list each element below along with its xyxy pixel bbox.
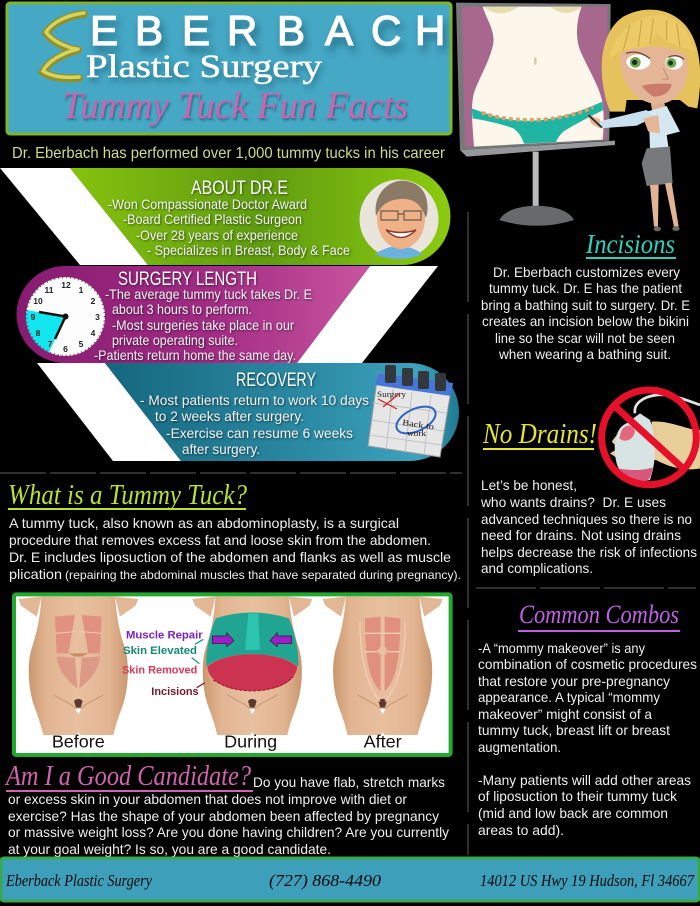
bullet list: -Won Compassionate Doctor Award bbox=[108, 196, 307, 212]
icon: calendar: Surgery bbox=[377, 390, 406, 399]
body text: helps decrease the risk of infections bbox=[481, 544, 697, 560]
icon: prohibited drain bbox=[602, 390, 700, 485]
icon: calendar: work bbox=[407, 428, 427, 438]
bullet list: - Specializes in Breast, Body & Face bbox=[147, 242, 350, 258]
section: common combos bbox=[478, 600, 697, 838]
bullet list bbox=[94, 286, 312, 363]
icon: clock: 10 bbox=[33, 296, 43, 306]
before figure: Before bbox=[52, 732, 105, 752]
body text: tummy tuck. Dr. E has the patient bbox=[489, 280, 682, 296]
body text: bring a bathing suit to surgery. Dr. E bbox=[481, 297, 690, 313]
icon: calendar bbox=[368, 365, 453, 457]
icon: clock: 7 bbox=[48, 339, 53, 349]
icon: clock: 9 bbox=[31, 312, 36, 322]
body text: procedure that removes excess fat and loose skin from the abdomen. bbox=[9, 532, 431, 548]
body text: appearance. A typical “mommy bbox=[478, 689, 660, 705]
body text: that restore your pre-pregnancy bbox=[478, 673, 670, 689]
body text: combination of cosmetic procedures bbox=[478, 656, 697, 672]
icon: clock: 5 bbox=[79, 339, 84, 349]
illustration: presenter with abdomen board bbox=[456, 3, 700, 231]
body text: A tummy tuck, also known as an abdominoplasty, is a surgical bbox=[9, 515, 399, 531]
body text: Do you have flab, stretch marks bbox=[253, 774, 445, 790]
bullet list bbox=[140, 392, 369, 457]
heading: What is a Tummy Tuck? bbox=[8, 480, 247, 511]
body text: line so the scar will not be seen bbox=[495, 330, 675, 346]
icon: clock: 3 bbox=[95, 312, 100, 322]
body text: Dr. E includes liposuction of the abdomen and flanks as well as muscle bbox=[9, 549, 451, 565]
bullet list: -Most surgeries take place in our bbox=[112, 317, 294, 333]
body text bbox=[480, 477, 697, 576]
board bbox=[456, 3, 615, 226]
heading: ABOUT DR.E bbox=[191, 178, 288, 199]
portrait of doctor bbox=[360, 180, 438, 259]
body text: areas to add). bbox=[478, 822, 564, 838]
section: what is a tummy tuck bbox=[8, 480, 461, 582]
body text: creates an incision below the bikini bbox=[482, 313, 689, 329]
bullet list: to 2 weeks after surgery. bbox=[155, 408, 304, 424]
bullet list: -Over 28 years of experience bbox=[136, 227, 298, 243]
icon: clock bbox=[26, 277, 105, 356]
icon: clock: 2 bbox=[91, 296, 96, 306]
body text: or massive weight loss? Are you done having children? Are you currently bbox=[8, 824, 449, 840]
body text: Dr. Eberbach customizes every bbox=[493, 264, 680, 280]
callout labels: Skin Elevated bbox=[123, 645, 197, 657]
body text bbox=[9, 515, 461, 582]
heading: RECOVERY bbox=[236, 370, 316, 391]
footer contact bar bbox=[1, 858, 699, 901]
panel: recovery bbox=[37, 363, 459, 461]
bullet list: -Board Certified Plastic Surgeon bbox=[123, 211, 302, 227]
icon: clock: 11 bbox=[44, 285, 54, 295]
after figure bbox=[323, 597, 443, 752]
body text: when wearing a bathing suit. bbox=[498, 346, 671, 362]
during figure bbox=[122, 597, 312, 752]
panel: about Dr. E bbox=[0, 168, 450, 265]
heading: No Drains! bbox=[482, 419, 597, 450]
body text: Let’s be honest, bbox=[481, 477, 577, 493]
logo wordmark: EBERBACH bbox=[90, 7, 445, 54]
body text: and complications. bbox=[481, 560, 593, 576]
body text: of liposuction to their tummy tuck bbox=[478, 788, 678, 804]
body text: plication bbox=[9, 566, 62, 582]
section: incisions bbox=[481, 229, 690, 362]
bullet list: private operating suite. bbox=[112, 332, 238, 348]
body text: tummy tuck, breast lift or breast bbox=[478, 722, 670, 738]
body text bbox=[481, 264, 690, 362]
callout labels: Skin Removed bbox=[122, 665, 197, 677]
icon: clock: 1 bbox=[79, 285, 84, 295]
body text: (mid and low back are common bbox=[478, 805, 668, 821]
before figure bbox=[18, 597, 138, 752]
logo mark bbox=[43, 13, 84, 78]
bullet list: - Most patients return to work 10 days bbox=[140, 392, 369, 408]
body text: (repairing the abdominal muscles that have separated during pregnancy). bbox=[65, 568, 461, 582]
body text: advanced techniques so there is no bbox=[481, 511, 692, 527]
heading: Am I a Good Candidate? bbox=[4, 761, 251, 792]
heading: Incisions bbox=[585, 229, 675, 259]
bullet list: -The average tummy tuck takes Dr. E bbox=[105, 286, 312, 302]
body text: augmentation. bbox=[478, 739, 561, 755]
practice name: Eberback Plastic Surgery bbox=[5, 871, 152, 890]
icon: clock: 6 bbox=[63, 344, 68, 354]
tagline: Dr. Eberbach has performed over 1,000 tummy tucks in his career bbox=[12, 145, 446, 162]
heading: Common Combos bbox=[519, 600, 679, 629]
icon: clock: 8 bbox=[36, 328, 41, 338]
bullet list: -Exercise can resume 6 weeks bbox=[166, 425, 353, 441]
bullet list: after surgery. bbox=[182, 441, 260, 457]
bullet list bbox=[108, 196, 350, 258]
section: no drains bbox=[480, 390, 700, 576]
during figure: During bbox=[224, 732, 277, 752]
callout labels bbox=[122, 629, 203, 698]
logo subtitle: Plastic Surgery bbox=[86, 49, 323, 85]
body text: at your goal weight? Is so, you are a good candidate. bbox=[8, 841, 331, 857]
body text: -Many patients will add other areas bbox=[478, 772, 691, 788]
bullet list: about 3 hours to perform. bbox=[112, 301, 252, 317]
body text: exercise? Has the shape of your abdomen been affected by pregnancy bbox=[8, 808, 439, 824]
callout labels: Incisions bbox=[151, 686, 199, 698]
body text bbox=[478, 640, 697, 838]
header banner bbox=[7, 3, 451, 134]
body text: or excess skin in your abdomen that does not improve with diet or bbox=[8, 791, 407, 807]
phone: (727) 868-4490 bbox=[269, 871, 382, 890]
callout labels: Muscle Repair bbox=[126, 629, 203, 641]
panel: before, during, after diagram bbox=[14, 594, 451, 755]
title: Tummy Tuck Fun Facts bbox=[62, 85, 408, 127]
section: good candidate bbox=[4, 761, 449, 857]
after figure: After bbox=[364, 732, 402, 752]
panel: surgery length bbox=[16, 266, 438, 363]
heading: SURGERY LENGTH bbox=[118, 269, 257, 290]
body text: who wants drains? Dr. E uses bbox=[480, 494, 666, 510]
body text: need for drains. Not using drains bbox=[481, 527, 681, 543]
bullet list: -Patients return home the same day. bbox=[94, 347, 296, 363]
body text: makeover” might consist of a bbox=[478, 706, 652, 722]
icon: clock: 12 bbox=[61, 280, 71, 290]
presenter bbox=[587, 10, 700, 231]
body text: -A “mommy makeover” is any bbox=[478, 640, 645, 656]
body text bbox=[8, 774, 449, 857]
icon: calendar: Back to bbox=[402, 417, 435, 431]
icon: clock: 4 bbox=[91, 328, 96, 338]
